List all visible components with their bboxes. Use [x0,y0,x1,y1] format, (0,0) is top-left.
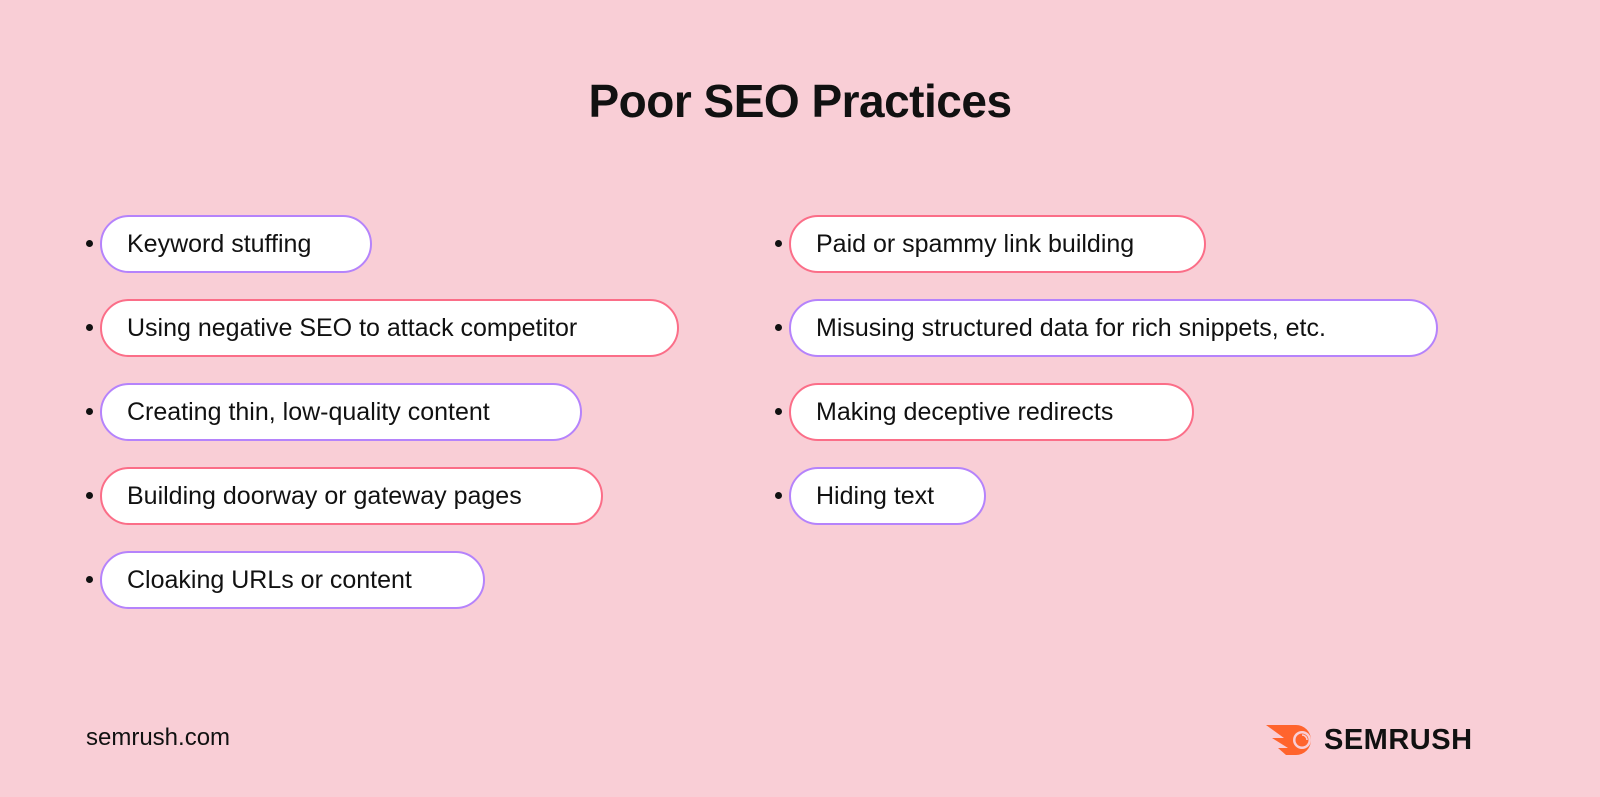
item: structured data [775,299,1438,357]
item: paid links [775,215,1206,273]
logo [1266,724,1473,756]
footer url: semrush.com [86,724,230,751]
item: cloaking: Cloaking URLs or content [127,566,412,594]
item: keyword stuffing [86,215,372,273]
item: thin content [86,383,582,441]
item: negative SEO [86,299,679,357]
icon: semrush flame [1266,725,1311,755]
title: Poor SEO Practices [588,75,1012,127]
item: hiding text: Hiding text [816,482,934,510]
item: redirects [775,383,1194,441]
item: negative SEO: Using negative SEO to attack competitor [127,314,577,342]
item: thin content: Creating thin, low-quality content [127,398,490,426]
item: doorway pages: Building doorway or gateway pages [127,482,522,510]
item: redirects: Making deceptive redirects [816,398,1113,426]
item: doorway pages [86,467,603,525]
item: structured data: Misusing structured data for rich snippets, etc. [816,314,1326,342]
item: cloaking [86,551,485,609]
item: paid links: Paid or spammy link building [816,230,1134,258]
item: hiding text [775,467,986,525]
logo text: SEMRUSH [1324,724,1473,756]
item: keyword stuffing: Keyword stuffing [127,230,311,258]
